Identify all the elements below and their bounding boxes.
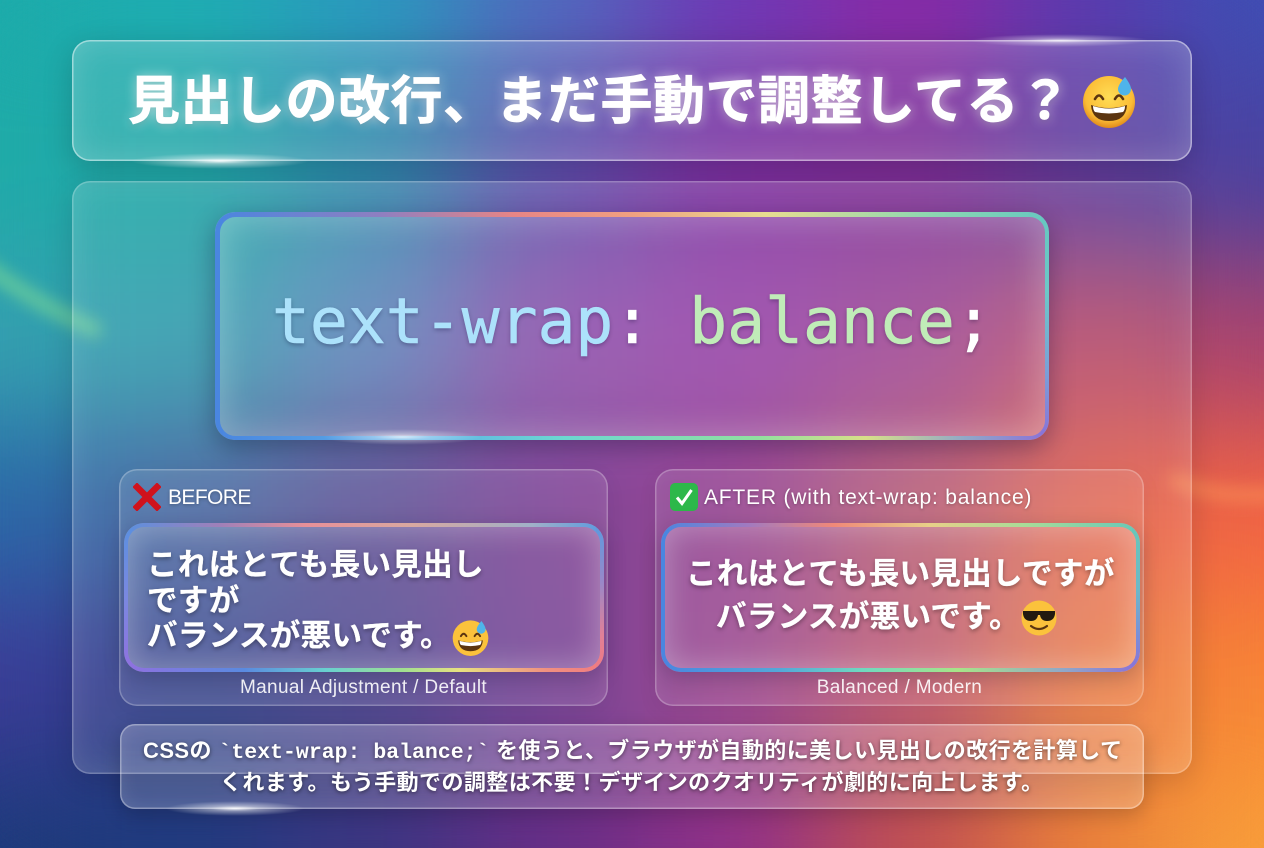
note text line 1: CSSの `text-wrap: balance;` を使うと、ブラウザが自動的に美しい見出しの改行を計算して <box>143 738 1122 765</box>
icon: smiling face with sunglasses <box>1022 600 1056 636</box>
panel: main <box>72 181 1192 774</box>
example text: balanced line 1: これはとても長い見出しですが <box>686 557 1115 591</box>
code box <box>202 207 1063 462</box>
gradient border <box>215 212 1049 440</box>
example heading box <box>117 522 610 685</box>
example text: balanced line 2: バランスが悪いです。 <box>716 600 1020 634</box>
flare: note bottom <box>165 801 305 816</box>
panel: explanation note <box>120 724 1144 809</box>
heading: 見出しの改行、まだ手動で調整してる？ <box>128 73 1071 131</box>
example heading box <box>654 518 1150 688</box>
icon: green check <box>670 483 698 511</box>
inner glass <box>124 523 604 672</box>
icon: red cross <box>133 483 161 511</box>
code text: text-wrap: balance; <box>272 285 993 358</box>
icon: grinning face with sweat <box>1083 76 1135 128</box>
example text: unbalanced: これはとても長い見出し <box>147 548 484 582</box>
example text: unbalanced: バランスが悪いです。 <box>147 619 451 653</box>
label: before: BEFORE <box>168 486 251 509</box>
panel: title bar <box>72 40 1192 161</box>
card: after <box>655 469 1144 706</box>
gradient border <box>124 523 604 672</box>
caption: before: Manual Adjustment / Default <box>240 677 487 698</box>
icon: grinning face with sweat <box>452 620 488 656</box>
example text: unbalanced <box>147 548 484 653</box>
flare: title top <box>970 34 1150 47</box>
inner glass <box>215 212 1049 440</box>
gradient border <box>661 523 1140 672</box>
flare: title bottom <box>130 153 310 169</box>
label: after: AFTER (with text-wrap: balance) <box>704 486 1032 509</box>
card: before <box>119 469 608 706</box>
example text: unbalanced: ですが <box>147 584 240 618</box>
caption: after: Balanced / Modern <box>817 677 982 698</box>
flare: code box bottom <box>322 429 482 445</box>
note text line 2: くれます。もう手動での調整は不要！デザインのクオリティが劇的に向上します。 <box>220 770 1044 795</box>
inner glass <box>661 523 1140 672</box>
